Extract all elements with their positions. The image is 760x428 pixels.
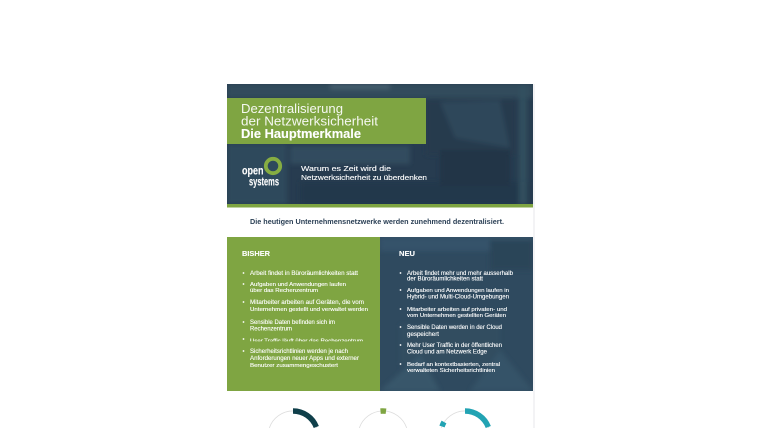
- list: Neu items: [400, 270, 513, 374]
- list: Neu items: Mehr User Traffic in der öffentlichen: [407, 342, 503, 349]
- header panel: [227, 84, 533, 204]
- list: Neu items: Bedarf an kontextbasierten, zentral: [407, 362, 500, 368]
- list: Neu items: Arbeit findet mehr und mehr ausserhalb: [407, 270, 513, 277]
- green divider strip: [227, 204, 533, 208]
- subtitle: [301, 164, 427, 182]
- list: Bisher items: Mitarbeiter arbeiten auf Geräten, die vom: [250, 299, 364, 306]
- list: Neu items: verwalteten Sicherheitsrichtlinien: [407, 368, 495, 374]
- Neu photo texture: [380, 237, 533, 391]
- title line 2: der Netzwerksicherheit: [241, 114, 379, 128]
- infographic document: [227, 84, 535, 428]
- heading: Bisher: BISHER: [242, 249, 270, 258]
- donut chart 3: [441, 411, 489, 428]
- panel: Bisher: [227, 237, 380, 391]
- list: Neu items: gespeichert: [407, 331, 439, 338]
- list: Neu items: Mitarbeiter arbeiten auf privaten- und: [407, 307, 507, 313]
- logo: open systems: systems: [249, 174, 279, 188]
- list: Neu items: Cloud und am Netzwerk Edge: [407, 348, 488, 356]
- list: Neu items: der Büroräumlichkeiten statt: [407, 276, 483, 282]
- list: Neu items: Hybrid- und Multi-Cloud-Umgebungen: [407, 294, 509, 300]
- list: Bisher items: Aufgaben und Anwendungen laufen: [250, 282, 346, 288]
- donut charts row: [269, 411, 489, 428]
- heading: Neu: NEU: [399, 249, 416, 258]
- title box: [227, 98, 426, 144]
- list: Neu items: vom Unternehmen gestellten Geräten: [407, 313, 506, 319]
- title line 1: Dezentralisierung: [241, 102, 343, 116]
- tagline: Die heutigen Unternehmensnetzwerke werden zunehmend dezentralisiert.: [250, 217, 504, 226]
- list: Bisher items: Benutzer zusammengeschustert: [250, 363, 338, 369]
- list: Bisher items: über das Rechenzentrum: [250, 288, 318, 294]
- logo: open systems: [242, 159, 280, 188]
- title line 3: Die Hauptmerkmale: [241, 127, 361, 141]
- logo: open systems: open: [242, 166, 264, 178]
- list: Bisher items: Arbeit findet in Büroräumlichkeiten statt: [250, 270, 358, 277]
- list: Bisher items: Sensible Daten befinden sich im: [250, 319, 335, 326]
- subtitle: Netzwerksicherheit zu überdenken: [301, 173, 427, 182]
- list: Bisher items: Unternehmen gestellt und verwaltet werden: [250, 307, 368, 313]
- list: Bisher items: Rechenzentrum: [250, 326, 292, 332]
- donut chart 1: [269, 411, 317, 428]
- list: Bisher items: Sicherheitsrichtlinien werden je nach: [250, 348, 348, 355]
- panel: Neu: [380, 237, 533, 391]
- subtitle: Warum es Zeit wird die: [301, 164, 391, 173]
- list: Neu items: Sensible Daten werden in der Cloud: [407, 324, 502, 331]
- list: Neu items: Aufgaben und Anwendungen laufen in: [407, 288, 509, 294]
- donut chart 2: [359, 411, 407, 428]
- list: Bisher items: User Traffic läuft über das Rechenzentrum: [250, 338, 363, 345]
- list: Bisher items: Anforderungen neuer Apps und externer: [250, 355, 360, 362]
- header photo texture: [227, 84, 533, 204]
- list: Bisher items: [243, 270, 368, 369]
